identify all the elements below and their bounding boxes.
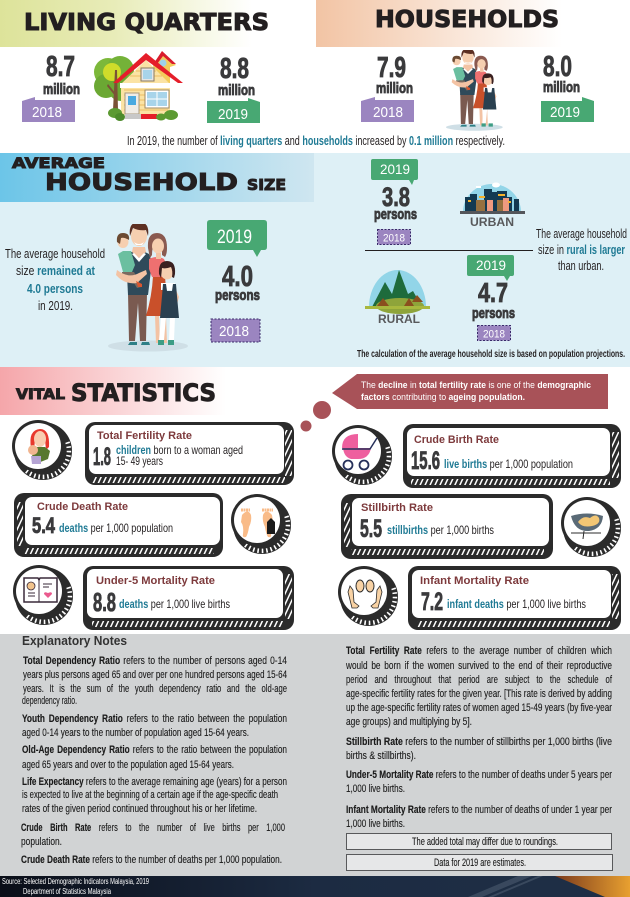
heading band [0, 367, 226, 415]
note: youth dependency ratio: Youth Dependency Ratio refers to the ratio between the population [22, 713, 287, 725]
note: life expectancy: rates of the given period continued throughout his or her lifetime. [22, 803, 257, 815]
heading: average household size: HOUSEHOLD [45, 170, 238, 196]
stat: 8.8 million in 2019 [207, 53, 260, 123]
stat: rural 4.7 persons: 2019 [476, 257, 506, 273]
stat: 8.0 million in 2019: 2019 [550, 104, 580, 121]
stat: 8.7 million in 2018: million [43, 81, 80, 98]
note: crude death rate: Crude Death Rate refers to the number of deaths per 1,000 population. [21, 854, 282, 866]
card: crude death rate: 5.4 [32, 513, 56, 538]
notes heading: Explanatory Notes [22, 633, 127, 648]
stat: 7.9 million in 2018: 2018 [373, 104, 403, 121]
stat: 4.0 persons: 2018 [219, 323, 249, 340]
note: old-age dependency ratio: Old-Age Dependency Ratio refers to the ratio between the population [22, 744, 287, 756]
note: total dependency ratio: dependency ratio. [22, 695, 77, 707]
stat: urban 3.8 persons: 2018 [383, 232, 405, 244]
stat: 7.9 million in 2018: million [376, 80, 413, 97]
card: total fertility rate: Total Fertility Rate [97, 430, 192, 442]
icon: house with tree [94, 51, 183, 121]
icon: urban skyline [460, 182, 525, 229]
card: infant mortality rate [408, 566, 621, 630]
card: crude birth rate [403, 424, 621, 488]
illustration: family [108, 222, 188, 352]
stat: 4.0 persons: 4.0 [222, 261, 253, 293]
card: crude birth rate: Crude Birth Rate [414, 434, 499, 446]
note box: estimates [346, 854, 612, 870]
text: average household size remained: in 2019. [38, 299, 73, 313]
icon: hands holding baby feet [338, 566, 398, 626]
card: under-5 mortality rate: Under-5 Mortality Rate [96, 575, 215, 587]
card: stillbirth rate: Stillbirth Rate [361, 502, 433, 514]
card: infant mortality rate: 7.2 [421, 588, 443, 616]
card: infant mortality rate: infant deaths per 1,000 live births [447, 597, 586, 611]
card: under-5 mortality rate [83, 566, 294, 630]
stat: 4.0 persons: 2019 [217, 227, 252, 248]
panel: households [316, 0, 594, 131]
note: total dependency ratio: years. It is the sum of the youth dependency ratio and the old-age [23, 683, 287, 695]
footer band [0, 876, 630, 897]
text: rural is larger: than urban. [558, 259, 604, 273]
callout: declining fertility: factors contributing to ageing population. [361, 392, 525, 403]
text: average household size remained: size remained at [16, 264, 96, 278]
text: rural is larger [536, 227, 627, 273]
stat: urban 3.8 persons: persons [374, 206, 417, 223]
note: under-5 mortality rate: 1,000 live births. [346, 783, 405, 795]
note: youth dependency ratio: aged 0-14 years to the number of population aged 15-64 years. [22, 727, 249, 739]
heading band [0, 153, 314, 202]
note: crude birth rate: population. [21, 836, 62, 848]
summary sentence: In 2019, the number of living quarters and households increased by 0.1 million respectively. [127, 134, 505, 148]
note box: roundings [346, 834, 612, 850]
note: under-5 mortality rate [346, 769, 612, 795]
heading: households: HOUSEHOLDS [375, 7, 559, 33]
stat: rural 4.7 persons: persons [472, 305, 515, 322]
card: crude birth rate: 15.6 [411, 447, 440, 475]
note: life expectancy: is expected to live at the beginning of a certain age if the age-specific death [22, 789, 278, 801]
note: total fertility rate: age groups) and multiplying by 5]. [346, 716, 472, 728]
stat: 8.7 million in 2018: 2018 [32, 104, 62, 121]
stat: 8.8 million in 2019: million [218, 82, 255, 99]
source text: Department of Statistics Malaysia [23, 887, 111, 896]
icon: baby pram [332, 425, 392, 485]
stat: urban 3.8 persons: 3.8 [382, 182, 410, 212]
note: life expectancy: Life Expectancy refers to the average remaining age (years) for a person [22, 776, 287, 788]
note: crude birth rate: Crude Birth Rate refers to the number of live births per 1,000 [21, 822, 285, 834]
note: total dependency ratio: Total Dependency Ratio refers to the number of persons aged 0-14 [23, 655, 287, 667]
stat: 8.7 million in 2018: 8.7 [46, 51, 75, 83]
notes background [0, 634, 630, 876]
stat: rural 4.7 persons: 4.7 [478, 277, 508, 308]
stat: 4.0 persons [207, 220, 267, 342]
note: total fertility rate [345, 645, 613, 728]
card: under-5 mortality rate: 8.8 [93, 587, 116, 617]
card: infant mortality rate: Infant Mortality Rate [420, 575, 529, 587]
icon: baby record book [13, 565, 73, 625]
panel background [0, 153, 630, 367]
text: average household size remained [5, 247, 105, 313]
stat: 8.0 million in 2019: million [543, 79, 580, 96]
stat: urban 3.8 persons: 2019 [380, 161, 410, 177]
note: total dependency ratio: years plus persons aged 65 and over per one hundred persons aged 15-64 [23, 669, 287, 681]
icon: feet with toe tag [231, 494, 291, 554]
note box: roundings: The added total may differ due to roundings. [412, 836, 558, 848]
panel: explanatory notes [0, 633, 630, 876]
note: crude birth rate [21, 822, 285, 848]
stat: 8.0 million in 2019 [541, 51, 594, 122]
card: stillbirth rate: 5.5 [360, 515, 382, 543]
source text: Source: Selected Demographic Indicators Malaysia, 2019 [2, 877, 149, 886]
icon: rural village: RURAL [378, 314, 420, 326]
card: total fertility rate: children born to a woman aged [116, 443, 243, 457]
note: infant mortality rate: 1,000 live births. [346, 818, 405, 830]
heading: vital statistics: STATISTICS [71, 379, 216, 407]
panel: average household size [0, 153, 630, 367]
note: stillbirth rate [346, 736, 612, 762]
heading band: households [316, 0, 562, 47]
panel: vital statistics [0, 367, 621, 630]
card: crude death rate: deaths per 1,000 population [59, 521, 173, 535]
card: total fertility rate: 1.8 [93, 443, 111, 471]
card: total fertility rate: 15- 49 years [116, 454, 163, 468]
panel: living quarters [0, 0, 269, 123]
card: stillbirth rate [341, 494, 553, 559]
callout: declining fertility: The decline in total fertility rate is one of the demographic [361, 380, 591, 391]
source text [2, 877, 149, 896]
card: crude death rate [14, 493, 223, 557]
card: stillbirth rate: stillbirths per 1,000 births [387, 523, 494, 537]
note: old-age dependency ratio [22, 744, 287, 771]
note: total dependency ratio [22, 655, 287, 707]
heading: living quarters: LIVING QUARTERS [24, 10, 269, 36]
card: crude birth rate: live births per 1,000 population [444, 457, 573, 471]
icon: rural village [365, 270, 430, 326]
card: total fertility rate [85, 422, 294, 485]
note: old-age dependency ratio: aged 65 years and over to the population aged 15-64 years. [22, 759, 234, 771]
stat: 7.9 million in 2018 [361, 52, 414, 122]
stat: rural 4.7 persons [467, 255, 515, 340]
stat: 7.9 million in 2018: 7.9 [377, 52, 406, 84]
heading: average household size: SIZE [247, 176, 286, 194]
note: youth dependency ratio [22, 713, 287, 739]
icon: ultrasound foetus [561, 497, 621, 557]
stat: 8.0 million in 2019: 8.0 [543, 51, 572, 83]
divider line [365, 250, 533, 251]
text: average household size remained: 4.0 persons [27, 282, 83, 296]
text: average household size remained: The average household [5, 247, 105, 261]
stat: urban 3.8 persons [371, 159, 418, 244]
illustration: family [446, 49, 503, 131]
heading: average household size: AVERAGE [12, 156, 105, 172]
heading: average household size [12, 156, 286, 196]
card: crude death rate: Crude Death Rate [37, 501, 128, 513]
card: under-5 mortality rate: deaths per 1,000 live births [119, 597, 230, 611]
heading band: living quarters [0, 0, 252, 47]
callout: declining fertility [332, 374, 608, 409]
stat: 8.8 million in 2019: 8.8 [220, 53, 249, 85]
stat: 8.8 million in 2019: 2019 [218, 106, 248, 123]
note box: estimates: Data for 2019 are estimates. [434, 857, 526, 869]
stat: 4.0 persons: persons [215, 287, 260, 304]
note: stillbirth rate: births & stillbirths). [346, 750, 416, 762]
icon: mother and child [12, 420, 72, 480]
heading: vital statistics: VITAL [16, 387, 65, 403]
note: infant mortality rate [346, 804, 612, 830]
thought bubble dots [300, 401, 331, 432]
icon: urban skyline: URBAN [470, 217, 514, 229]
note: life expectancy [22, 776, 287, 815]
stat: 8.7 million in 2018 [22, 51, 80, 122]
stat: rural 4.7 persons: 2018 [483, 328, 505, 340]
